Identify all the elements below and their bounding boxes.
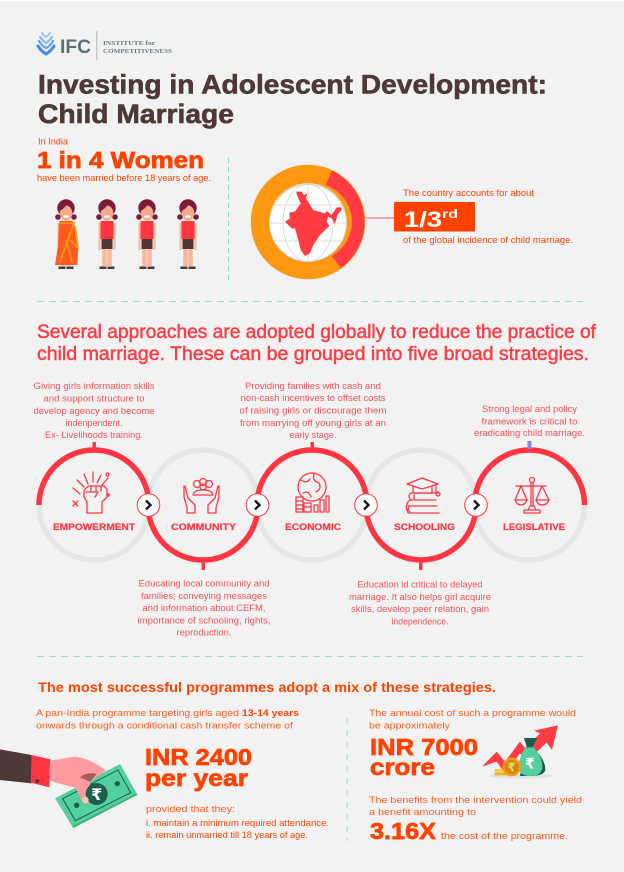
icon: map of India — [285, 192, 342, 256]
icon: layered leaf mark — [38, 33, 54, 54]
icon: books and graduation cap — [406, 478, 440, 513]
title — [38, 70, 547, 129]
heading: most successful programmes: The most successful programmes adopt a mix of these strategies. — [38, 679, 496, 695]
text: annual cost: The annual cost of such a programme would — [369, 708, 576, 719]
heading: five broad strategies: Several approaches are adopted globally to reduce the practice of — [37, 322, 597, 343]
text: conditions — [146, 804, 329, 841]
label: schooling: SCHOOLING — [394, 522, 455, 533]
stat: 3.16X the cost: the cost of the programme. — [441, 831, 568, 842]
text: pan-India programme: 13-14 years — [242, 708, 299, 719]
text: empowerment description — [34, 381, 155, 440]
heading: five broad strategies: child marriage. These can be grouped into five broad strategies. — [37, 344, 589, 365]
arrow: empowerment to community — [137, 494, 160, 516]
text: community description: Educating local community and — [138, 578, 270, 588]
callout: one third of global incidence: of the global incidence of child marriage. — [403, 235, 573, 246]
text: community description: and information about CEFM, — [142, 603, 266, 613]
icon: money bag, coins and rising arrow — [482, 725, 558, 779]
stat: INR 2400 per year — [145, 744, 252, 791]
text: schooling description: skills, develop peer relation, gain — [351, 604, 489, 614]
text: community description: families; conveying messages — [141, 591, 268, 601]
text: conditions: ii. remain unmarried till 18 years of age. — [146, 830, 308, 841]
text: annual cost: be approximately — [369, 720, 450, 732]
icon: globe with coin stacks and bar chart — [296, 473, 329, 512]
stat: INR 2400 per year: INR 2400 — [145, 744, 252, 770]
chart: one third donut with India map — [260, 170, 364, 270]
icon: hand holding rupee note — [0, 749, 137, 828]
text: legislative description: Strong legal and policy — [482, 404, 578, 414]
arrow: schooling to legislative — [465, 494, 487, 516]
callout: one third of global incidence: 1/3 — [404, 207, 442, 232]
text: community description: reproduction. — [176, 628, 232, 638]
icon: money bag, coins and rising arrow: ₹ — [507, 761, 516, 775]
callout: one third of global incidence: rd — [442, 207, 458, 221]
stat: INR 7000 crore — [370, 734, 478, 780]
text: economic description: from marrying off young girls at an — [240, 418, 386, 428]
text: benefits: a benefit amounting to — [369, 807, 476, 818]
arrow: economic to schooling — [355, 494, 377, 516]
icon: raised fist — [73, 472, 109, 513]
panel: 1 in 4 women statistic: In India — [38, 136, 69, 148]
panel: 1 in 4 women statistic — [37, 136, 211, 184]
text: schooling description — [349, 580, 491, 626]
icon: scales of justice — [515, 478, 549, 513]
logo: IFC Institute for Competitiveness: COMPETITIVENESS — [103, 48, 173, 55]
text: benefits — [369, 795, 582, 818]
label: legislative: LEGISLATIVE — [503, 522, 565, 533]
text: benefits: The benefits from the intervention could yield — [369, 795, 582, 806]
stat: 3.16X the cost: 3.16X — [370, 818, 437, 844]
arrow: community to economic — [246, 494, 269, 516]
text: empowerment description: develop agency and become — [34, 406, 154, 416]
logo: IFC Institute for Competitiveness — [38, 31, 173, 60]
diagram: five linked strategy rings — [39, 441, 584, 570]
panel: 1 in 4 women statistic: 1 in 4 Women — [37, 147, 204, 173]
text: community description — [138, 578, 270, 638]
stat: INR 2400 per year: per year — [145, 765, 248, 791]
text: schooling description: marriage. It also helps girl acquire — [349, 592, 491, 602]
icon: money bag, coins and rising arrow: ₹ — [525, 756, 535, 773]
stat: 3.16X the cost — [370, 818, 568, 844]
text: pan-India programme: A pan-India programme targeting girls aged — [36, 708, 239, 719]
text: empowerment description: and support structure to — [44, 394, 144, 404]
label: empowerment: EMPOWERMENT — [53, 522, 135, 533]
text: conditions: i. maintain a minimum required attendance. — [146, 818, 329, 829]
icon: globe — [270, 184, 346, 262]
text: economic description: non-cash incentives to offset costs — [240, 393, 386, 403]
icon: hand holding rupee note: ₹ — [91, 785, 102, 804]
text: schooling description: independence. — [392, 616, 448, 626]
stat: INR 7000 crore: INR 7000 — [370, 734, 478, 760]
text: legislative description — [474, 404, 585, 438]
title: Child Marriage — [38, 99, 234, 129]
text: economic description: early stage. — [290, 430, 336, 440]
callout: one third of global incidence — [394, 188, 573, 246]
text: legislative description: framework is critical to — [482, 416, 578, 426]
text: pan-India programme: onwards through a conditional cash transfer scheme of — [36, 720, 293, 732]
title: Investing in Adolescent Development: — [38, 70, 547, 100]
text: empowerment description: Ex- Livelihoods training. — [45, 430, 143, 440]
heading: five broad strategies — [37, 322, 597, 365]
stat: INR 7000 crore: crore — [370, 754, 435, 780]
text: pan-India programme — [36, 708, 299, 732]
text: community description: importance of schooling, rights, — [138, 616, 270, 626]
label: economic: ECONOMIC — [285, 522, 341, 533]
logo: IFC Institute for Competitiveness: INSTITUTE for — [103, 40, 155, 47]
text: economic description: of raising girls or discourage them — [240, 406, 386, 416]
panel: 1 in 4 women statistic: have been married before 18 years of age. — [37, 173, 211, 184]
text: conditions: provided that they: — [146, 804, 235, 815]
text: economic description: Providing families with cash and — [245, 381, 381, 391]
text: annual cost — [369, 708, 576, 732]
text: empowerment description: Giving girls information skills — [34, 381, 155, 391]
logo: IFC Institute for Competitiveness: IFC — [60, 37, 91, 58]
text: legislative description: eradicating child marriage. — [474, 428, 585, 438]
text: economic description — [240, 381, 386, 440]
label: community: COMMUNITY — [171, 522, 237, 533]
icon: four women figures, one in a sari — [55, 199, 199, 269]
text: schooling description: Education id critical to delayed — [358, 580, 482, 590]
text: empowerment description: indenpendent. — [66, 418, 122, 428]
icon: hands holding community — [184, 478, 219, 513]
callout: one third of global incidence: The country accounts for about — [403, 188, 534, 199]
